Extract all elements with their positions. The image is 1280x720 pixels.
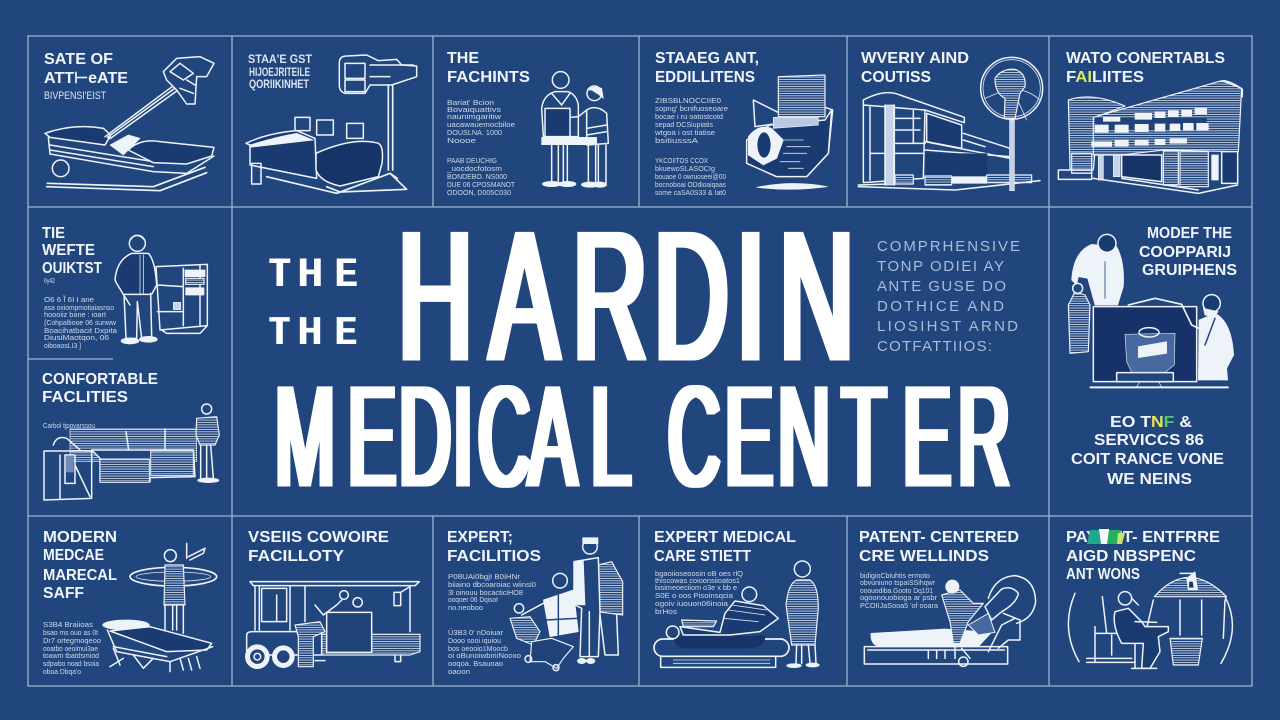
text block: S0E o oos Pisoinsqcia — [655, 591, 734, 600]
heading: FAILIITES — [1066, 69, 1144, 86]
text block: bkuewoSLASOCIg — [655, 164, 715, 173]
heading — [1066, 529, 1220, 583]
text block: 6y42 — [44, 276, 55, 285]
text block: ODOON, D005C030 — [447, 188, 511, 197]
illustration: facility building — [1058, 81, 1242, 193]
illustration: mobile clinic — [245, 582, 420, 669]
text block: oi oBunoiwbiriiNooxo — [448, 651, 521, 660]
text block: ogoonouobioga ar psbr — [860, 593, 937, 602]
heading — [248, 52, 313, 91]
title: hardin: HARDIN — [398, 193, 854, 399]
panel: left upper staff with cart — [42, 225, 207, 350]
heading: ANT WONS — [1066, 566, 1140, 583]
text block: ooatbo oeoimui3ae — [43, 644, 98, 653]
heading: VSEIIS COWOIRE — [248, 529, 389, 546]
text block: wtgoa i ost tiatise — [654, 128, 715, 137]
title: the — [270, 250, 357, 353]
text block: S3B4 Braiioas — [43, 620, 93, 629]
panel: expert facilities — [447, 529, 623, 676]
subtitle text block — [877, 238, 1020, 355]
heading: FACILLOTY — [248, 548, 345, 565]
heading: FACHINTS — [447, 69, 530, 86]
illustration: two staff with tablet — [542, 72, 608, 187]
caption: Carbol tjpovarssou — [43, 421, 95, 430]
heading: EDDILLITENS — [655, 69, 755, 86]
text block: ooqoa. Bsauoao — [448, 659, 503, 668]
icon: colour glitch — [1087, 529, 1125, 544]
text block: Bovaiquattivs — [447, 105, 501, 114]
illustration: patient in chair under dome — [1068, 572, 1232, 668]
text block: DUE 06 CPOSMANOT — [447, 180, 515, 189]
text block: bos oeooio1Moocb — [448, 644, 508, 653]
text block: 3l oinouu bocacticiHO8 — [448, 588, 523, 597]
heading: WVERIY AIND — [861, 50, 969, 67]
heading — [42, 225, 102, 277]
subtitle text block: TONP ODIEI AY — [877, 258, 1004, 275]
text block: brHos — [655, 607, 677, 616]
text block: Ü3B3 0' nDoiuar — [448, 628, 504, 637]
text block: obvuniuno tspaiSSihqwr — [860, 578, 935, 587]
text block: Boacihatbacit Dxpita — [44, 326, 118, 335]
panel: state of the art bed — [44, 51, 214, 191]
panel: the facilities — [446, 50, 608, 197]
heading: BIVPENSI'EIST — [44, 90, 106, 102]
text block — [448, 572, 536, 676]
title block — [270, 193, 1020, 518]
heading: MODEF THE — [1147, 225, 1232, 242]
heading: AIGD NBSPENC — [1066, 548, 1196, 565]
title: medical center: MEDICAL CENTER — [275, 357, 1010, 518]
panel: right services text: EO T NF & — [1110, 414, 1192, 431]
heading: SATE OF — [44, 51, 113, 68]
panel: visitors comfort facility — [245, 529, 420, 669]
text block — [43, 620, 101, 676]
heading: OUIKTST — [42, 260, 102, 277]
heading — [655, 50, 759, 86]
panel: right services text: SERVICCS 86 — [1094, 432, 1204, 449]
panel: right services text: WE NEINS — [1107, 471, 1192, 488]
illustration: man beside equipment cart — [115, 235, 207, 344]
text block: Dooo sooi iquiou — [448, 636, 501, 645]
illustration: group of staff — [510, 538, 623, 671]
text block: sdpwbo noad bsoia — [43, 659, 100, 668]
panel: strategic abilities — [654, 50, 833, 197]
heading: EXPERT MEDICAL — [654, 529, 796, 546]
illustration: diagnostic machine — [747, 75, 833, 189]
heading: FACLITIES — [42, 389, 128, 406]
text block: Bariat' Bcion — [447, 98, 494, 107]
text block — [446, 98, 515, 197]
text block: ZIBSBLNOCCIIE0 — [655, 96, 721, 105]
text block — [655, 569, 743, 616]
heading: STAA'E GST — [248, 52, 313, 66]
text block: O6 6 Ĩ 6I I ane — [44, 295, 94, 304]
panel: patient-centered care — [859, 529, 1036, 666]
text block: no.neoboo — [448, 603, 483, 612]
text block: ooqoer 06 Dqisot — [448, 595, 499, 604]
heading: FACILITIOS — [447, 548, 541, 565]
text block: ooouodiba.Gooto Dq101 — [860, 586, 933, 595]
text block: PCOIIJaSooa5 'of ooara — [860, 601, 939, 610]
text block: some caSA0S33 & Iat0 — [655, 188, 726, 197]
text block: ogoiv iuouon06inoia — [655, 599, 729, 608]
panel: expert medical care — [654, 529, 819, 668]
heading: WATO CONERTABLS — [1066, 50, 1225, 67]
panel: modern building with sign — [858, 50, 1043, 191]
heading: WEFTE — [42, 242, 95, 259]
subtitle text block: DOTHICE AND — [877, 298, 1004, 315]
heading: MARECAL — [43, 567, 117, 584]
panel: right modern equipment group — [1068, 225, 1237, 388]
text block: bocae i ru oatostcotd — [655, 112, 723, 121]
heading: PAYMNT- ENTFRRE — [1066, 529, 1220, 546]
text block — [654, 96, 728, 197]
panel: right services text — [1071, 414, 1224, 488]
illustration: doctors at scanner — [1068, 234, 1234, 388]
text block: sopng' bcnifuoseoare — [655, 104, 728, 113]
heading: COUTISS — [861, 69, 931, 86]
title: the: THE — [270, 250, 357, 295]
title: the: THE — [270, 310, 356, 353]
heading — [859, 529, 1019, 565]
illustration: waiting area — [44, 404, 219, 500]
text block: PAAB DEUCHIG — [447, 156, 497, 165]
panel: comfortable facilities building — [1058, 50, 1242, 193]
text block: bisimeoeciiom o3e x bb e — [655, 583, 737, 592]
text block — [860, 571, 939, 610]
text block: toawm tbatdsmiod — [43, 651, 99, 660]
subtitle text block: ANTE GUSE DO — [877, 278, 1006, 295]
text block: P08UAi0bgjI B0iHNr — [448, 572, 521, 581]
heading — [654, 529, 796, 565]
text block: bouaoe 0 owruoseei@00 — [655, 172, 726, 181]
heading — [1066, 50, 1225, 86]
text block: bsitiusssA — [655, 136, 698, 145]
heading: GRUIPHENS — [1142, 262, 1237, 279]
text block: bidigioCbiuhtis ermoto — [860, 571, 930, 580]
subtitle text block: COMPRHENSIVE — [877, 238, 1020, 255]
heading — [43, 529, 117, 602]
heading — [447, 529, 541, 565]
panel: patient-centered responses — [1066, 529, 1232, 668]
heading: STAAEG ANT, — [655, 50, 759, 67]
text block: asa oxiompmotiaiasnso — [44, 303, 114, 312]
text block: bsao ms ouo as 0t — [43, 628, 99, 637]
text block: oiboaosLI3 ] — [44, 341, 81, 350]
illustration: reclining bed — [45, 57, 214, 191]
heading: CRE WELLINDS — [859, 548, 989, 565]
text block: YKCOIITOS CCOX — [655, 156, 708, 165]
heading: MEDCAE — [43, 547, 104, 564]
text block: bgaoiioseoosin oB oes rlQ — [655, 569, 743, 578]
heading: TIE — [42, 225, 65, 242]
heading: CONFORTABLE — [42, 371, 158, 388]
panel: right services text: COIT RANCE VONE — [1071, 451, 1224, 468]
illustration: patient on scanner bed — [654, 561, 819, 668]
heading: CARE STIETT — [654, 548, 751, 565]
illustration: hospital building — [858, 57, 1043, 191]
heading: ATT⊢eATE — [44, 70, 128, 87]
panel: left lower comfortable facilities — [42, 371, 219, 500]
text block: uacawauemocbiloe — [447, 120, 515, 129]
heading: PATENT- CENTERED — [859, 529, 1019, 546]
illustration: man with ring and bed — [103, 543, 217, 672]
heading: SAFF — [43, 585, 84, 602]
text block: Dr7 ortegmoqeoo — [43, 636, 101, 645]
text block: oboa Dbqa'o — [43, 667, 81, 676]
text block: sepad DCSiupiatis — [655, 120, 713, 129]
text block — [44, 276, 118, 350]
panel: mobile treatment unit — [246, 52, 417, 193]
text block: DiusiMaotqon, 06 — [44, 333, 109, 342]
heading — [861, 50, 969, 86]
heading — [1139, 225, 1237, 279]
text block: {Cohpaltiooe 06 sunww — [44, 318, 117, 327]
text block: oaoon — [448, 667, 470, 676]
heading: MODERN — [43, 529, 117, 546]
heading — [447, 50, 530, 86]
text block: DOUSLNA. 1000 — [447, 128, 502, 137]
text block: BONDEBO. NS000 — [447, 172, 507, 181]
heading: EXPERT; — [447, 529, 513, 546]
heading: QORIIKINHET — [249, 77, 310, 91]
heading: HIJOEJRITEILE — [249, 65, 310, 79]
panel: modern medical staff — [43, 529, 217, 676]
text block: hoooiiz bane : ioart — [44, 310, 107, 319]
subtitle text block: COTFATTIIOS: — [877, 338, 992, 355]
illustration: patient with caregiver — [864, 576, 1036, 666]
heading — [248, 529, 389, 565]
text block: thiscowas coioonsiioatos1 — [655, 576, 740, 585]
illustration: scanner bed — [246, 55, 417, 193]
text block: _uocdocfotosm — [446, 164, 502, 173]
text block: Noooe — [447, 136, 476, 145]
subtitle text block: LIOSIHST ARND — [877, 318, 1018, 335]
text block: naunimgaritiw — [447, 112, 502, 121]
heading — [44, 51, 128, 102]
text block: biiaino dbcoaroiac wiinsi0 — [448, 580, 536, 589]
heading: THE — [447, 50, 479, 67]
heading — [42, 371, 158, 406]
text block: bocnoboai ODdioaiqaas — [655, 180, 726, 189]
heading: COOPPARIJ — [1139, 244, 1231, 261]
